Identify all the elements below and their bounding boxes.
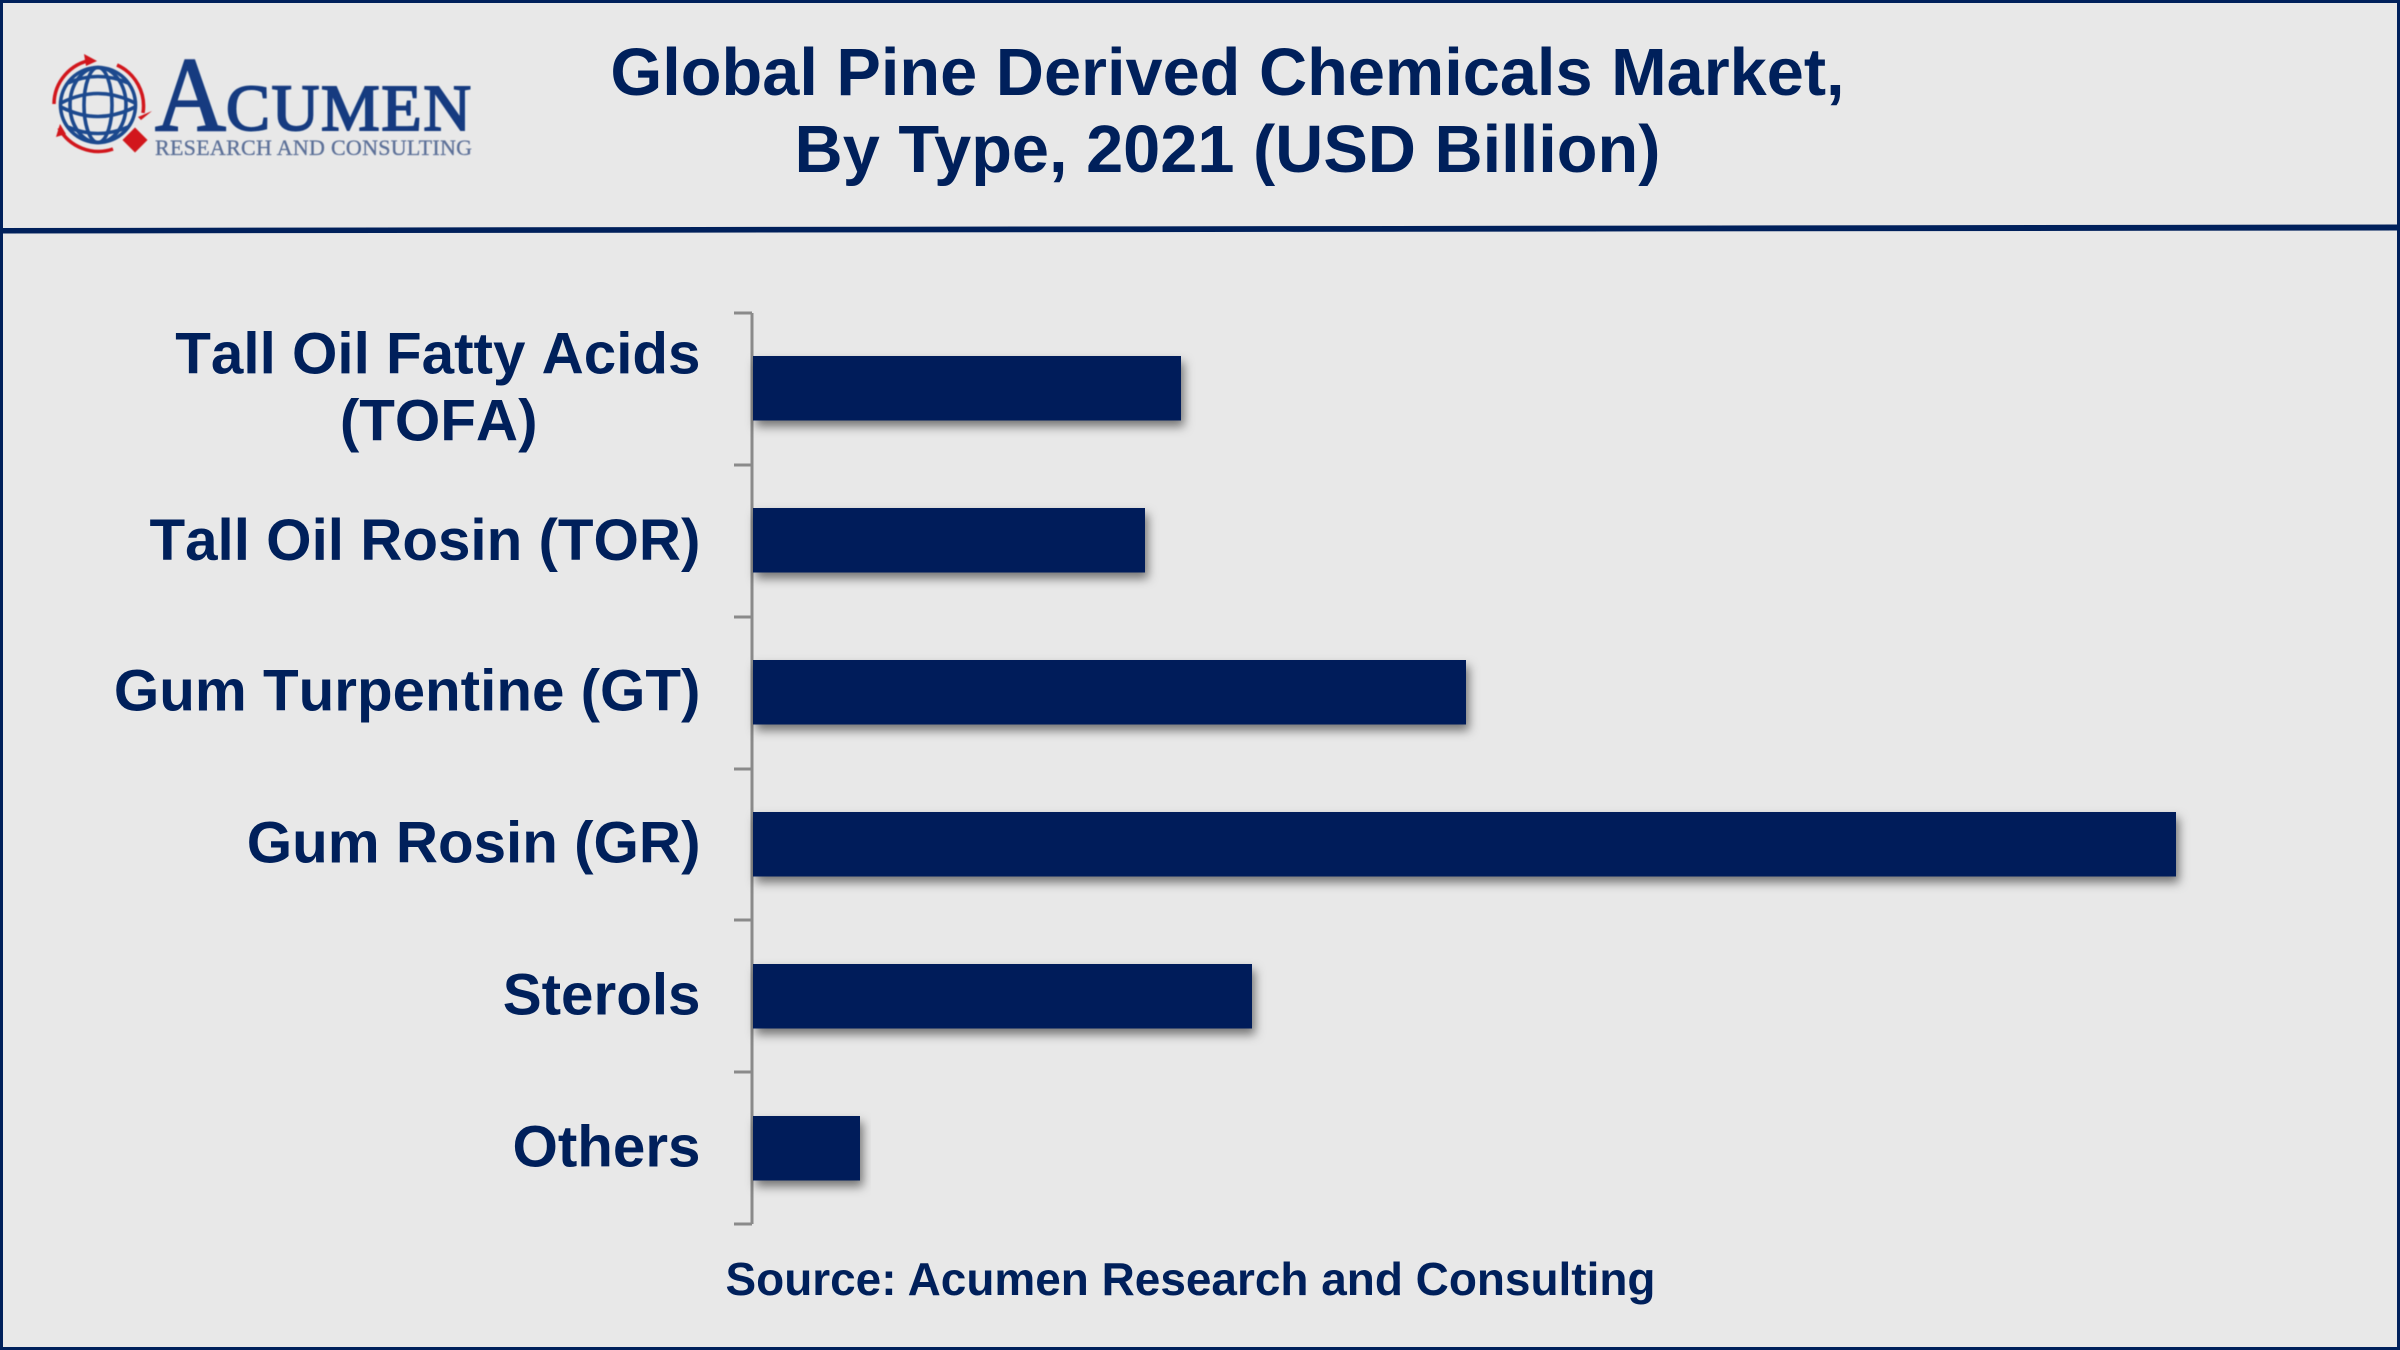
title <box>610 36 1845 187</box>
label: TOR: Tall Oil Rosin (TOR) <box>149 508 700 573</box>
bar chart <box>114 313 2176 1224</box>
label: Others: Others <box>512 1114 700 1180</box>
title: Global Pine Derived Chemicals Market, <box>610 36 1845 110</box>
bar: GT <box>753 660 1466 724</box>
label: GR: Gum Rosin (GR) <box>247 810 700 876</box>
bar: GR <box>753 812 2176 876</box>
label: TOFA <box>175 322 700 454</box>
logo wordmark: A <box>155 36 226 153</box>
logo tagline: RESEARCH AND CONSULTING <box>155 135 472 160</box>
logo: Acumen Research and Consulting <box>54 36 472 160</box>
logo wordmark <box>155 36 471 153</box>
bar: TOFA <box>753 356 1181 420</box>
label: Sterols: Sterols <box>503 962 700 1028</box>
source note: Source: Acumen Research and Consulting <box>726 1253 1656 1305</box>
axis <box>734 313 752 1224</box>
header divider <box>0 224 2400 234</box>
logo wordmark: CUMEN <box>226 72 471 145</box>
bar: Others <box>753 1116 860 1180</box>
label: TOFA: Tall Oil Fatty Acids <box>175 322 700 386</box>
label: TOFA: (TOFA) <box>340 388 538 454</box>
bar: TOR <box>753 508 1145 572</box>
title: By Type, 2021 (USD Billion) <box>795 113 1660 187</box>
bar: Sterols <box>753 964 1252 1028</box>
icon: globe with red arrows <box>54 54 152 152</box>
label: GT: Gum Turpentine (GT) <box>114 658 700 724</box>
